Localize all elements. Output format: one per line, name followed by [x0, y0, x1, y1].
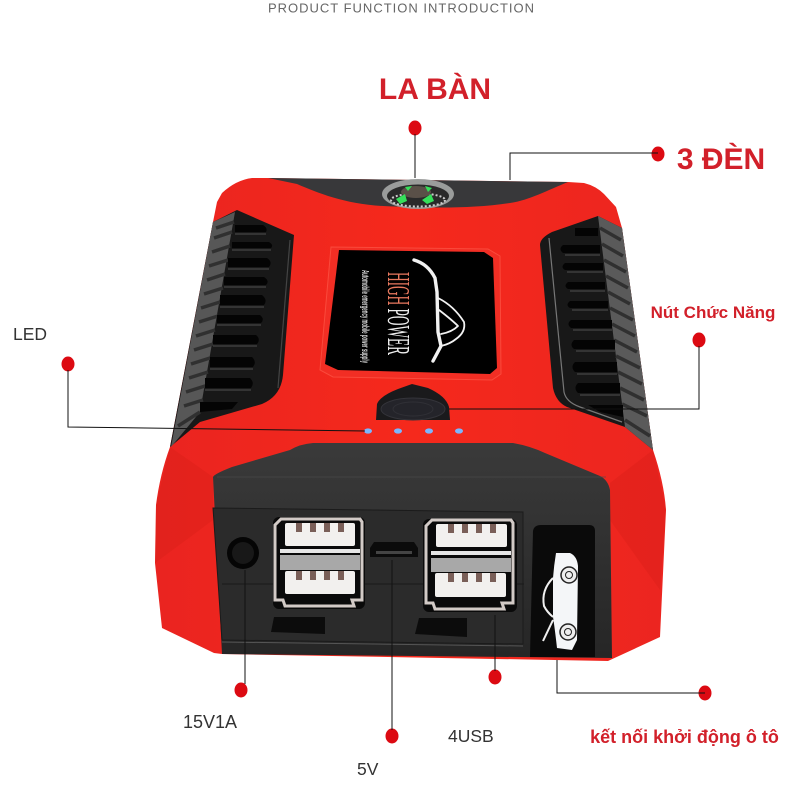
- callout: three lights: 3 ĐÈN: [677, 142, 765, 176]
- inner port panel: [213, 508, 523, 644]
- high power label: [320, 247, 501, 380]
- USB ports right: [423, 519, 517, 612]
- callout: 15V1A: [183, 570, 248, 732]
- callout: 5V: 5V: [357, 759, 379, 779]
- callout: 4USB: [448, 615, 502, 746]
- power bank device: [155, 178, 666, 661]
- callout: 5V: [357, 560, 398, 779]
- callout: 4USB: 4USB: [448, 726, 494, 746]
- LED indicators: [364, 428, 463, 434]
- front dark panel: [213, 443, 612, 658]
- callout: function button: Nút Chức Năng: [651, 303, 775, 322]
- device top shell: [155, 178, 666, 661]
- callout: function button: [449, 303, 775, 409]
- callout: car start connection: kết nối khởi động ô tô: [590, 727, 779, 747]
- label title: HIGH POWER: [381, 272, 417, 355]
- left grip pad: [170, 210, 294, 447]
- top dark strip: [268, 178, 568, 208]
- DC jack: [227, 537, 259, 569]
- callout: compass: LA BÀN: [379, 72, 491, 106]
- callout: three lights: [510, 142, 765, 180]
- power button: [376, 384, 450, 420]
- logo car outline: [414, 260, 441, 361]
- USB ports left: [273, 517, 365, 609]
- header: product function introduction: PRODUCT FUNCTION INTRODUCTION: [268, 0, 535, 16]
- right grip pad: [540, 216, 653, 450]
- callout: 15V1A: 15V1A: [183, 712, 237, 732]
- callout: LED: [13, 324, 365, 431]
- compass: [382, 179, 454, 209]
- lower shell shading: [155, 447, 666, 590]
- callout: compass: [379, 72, 491, 178]
- micro USB port: [370, 542, 418, 557]
- high power label: Automobile emergency mobile power supply: [359, 270, 370, 363]
- car jump-start port: [530, 525, 595, 657]
- callout: LED: LED: [13, 324, 47, 344]
- callout: car start connection: [557, 660, 779, 747]
- vent slots: [271, 617, 467, 637]
